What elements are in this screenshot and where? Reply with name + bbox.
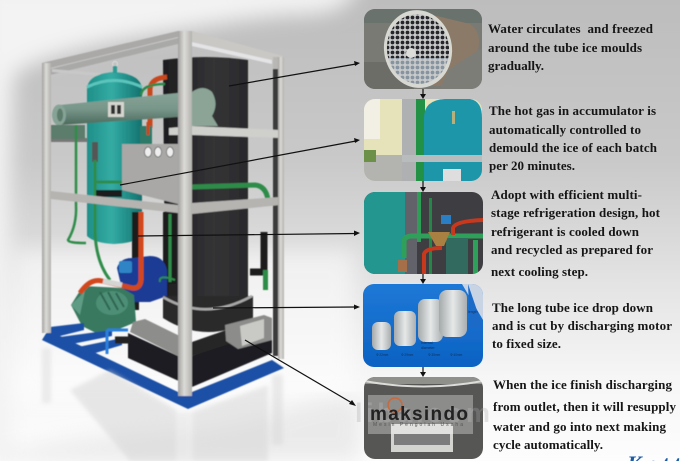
arrow: step 4 to 5	[420, 367, 426, 377]
watermark: maksindo logo: maksindo	[370, 404, 468, 425]
text: step 4: to fixed size.	[492, 336, 561, 351]
text: step 4: The long tube ice drop down	[492, 300, 654, 315]
arrow: step 1 to 2	[420, 89, 426, 99]
image: ice tubes: diameter	[421, 346, 435, 350]
image: ice tubes: Φ 35mm	[428, 353, 441, 357]
discharge outlet	[225, 315, 272, 349]
arrow: to image 1	[229, 61, 360, 86]
gauges	[144, 147, 174, 157]
text: step 1: Water circulates and freezed	[488, 21, 654, 36]
image: accumulator	[364, 99, 482, 181]
orange discharge pipe	[80, 212, 141, 293]
arrow: to image 4	[213, 304, 360, 310]
image: ice tubes	[363, 284, 483, 367]
blue base frame	[42, 323, 284, 409]
lower plumbing	[132, 212, 139, 310]
panel: step images	[363, 6, 483, 459]
text: step 5: water and go into next making	[493, 419, 666, 434]
text: step 2: demould the ice of each batch	[489, 140, 658, 155]
text: step 3: Adopt with efficient multi-	[491, 187, 642, 202]
dark column	[163, 57, 248, 305]
base tank	[128, 326, 272, 387]
image: tube ice mould	[364, 6, 482, 92]
text: step 1	[488, 21, 654, 73]
text: step 1: gradually.	[488, 58, 544, 73]
teal tank	[87, 72, 142, 244]
text: step 4	[492, 300, 672, 351]
connector arrows	[120, 61, 426, 406]
image: ice tubes: length	[468, 310, 478, 314]
image: ice tubes: Φ 40mm	[450, 353, 463, 357]
arrow: to image 5	[245, 340, 356, 406]
text: step 1: around the tube ice moulds	[488, 40, 642, 55]
watermark: maksindo logo: Mesin Pengolah Usaha	[373, 422, 463, 428]
text: step 2	[489, 103, 658, 173]
arrow: step 2 to 3	[420, 181, 426, 192]
text: step 3: refrigerant is cooled down	[491, 224, 640, 239]
condenser pipe	[60, 93, 178, 125]
text: step 2: The hot gas in accumulator is	[489, 103, 656, 118]
compressor	[71, 286, 136, 336]
text: step 3: and recycled as prepared for	[491, 242, 653, 257]
text: step 3	[491, 187, 661, 279]
insulated side pipe	[250, 232, 264, 272]
text: step 5: When the ice finish discharging	[493, 377, 672, 392]
text: step 3: stage refrigeration design, hot	[491, 205, 661, 220]
steel control panel	[122, 144, 178, 204]
lower left green pipe	[68, 125, 86, 243]
text: step 2: automatically controlled to	[489, 122, 641, 137]
blue motor	[117, 256, 167, 302]
image: discharge outlet	[364, 377, 483, 459]
orange pipe	[150, 77, 167, 128]
arrow: to image 3	[138, 230, 360, 236]
text: step 5: cycle automatically.	[493, 437, 603, 452]
text: step 3: next cooling step.	[491, 264, 588, 279]
stainless frame	[42, 31, 284, 396]
text: step 5	[493, 377, 676, 452]
machine photo	[42, 31, 284, 409]
text: step 5: from outlet, then it will resupply	[493, 399, 676, 414]
image: ice tubes: internal	[421, 341, 433, 345]
watermark: alibaba: liba.com	[355, 398, 490, 428]
image: refrigeration	[364, 192, 483, 274]
reflection of machine	[42, 348, 283, 461]
image: ice tubes: Φ 29mm	[401, 353, 414, 357]
flange	[192, 88, 218, 126]
shelf	[169, 126, 280, 138]
rear frame	[50, 38, 178, 75]
image: ice tubes: Φ 22mm	[376, 353, 389, 357]
arrow: to image 2	[120, 138, 360, 185]
column base	[163, 296, 253, 332]
text: step 4: and is cut by discharging motor	[492, 318, 672, 333]
watermark: maksindo logo	[368, 395, 473, 434]
arrow: step 3 to 4	[420, 274, 426, 284]
text: step 2: per 20 minutes.	[489, 158, 575, 173]
green pipes	[92, 142, 98, 162]
